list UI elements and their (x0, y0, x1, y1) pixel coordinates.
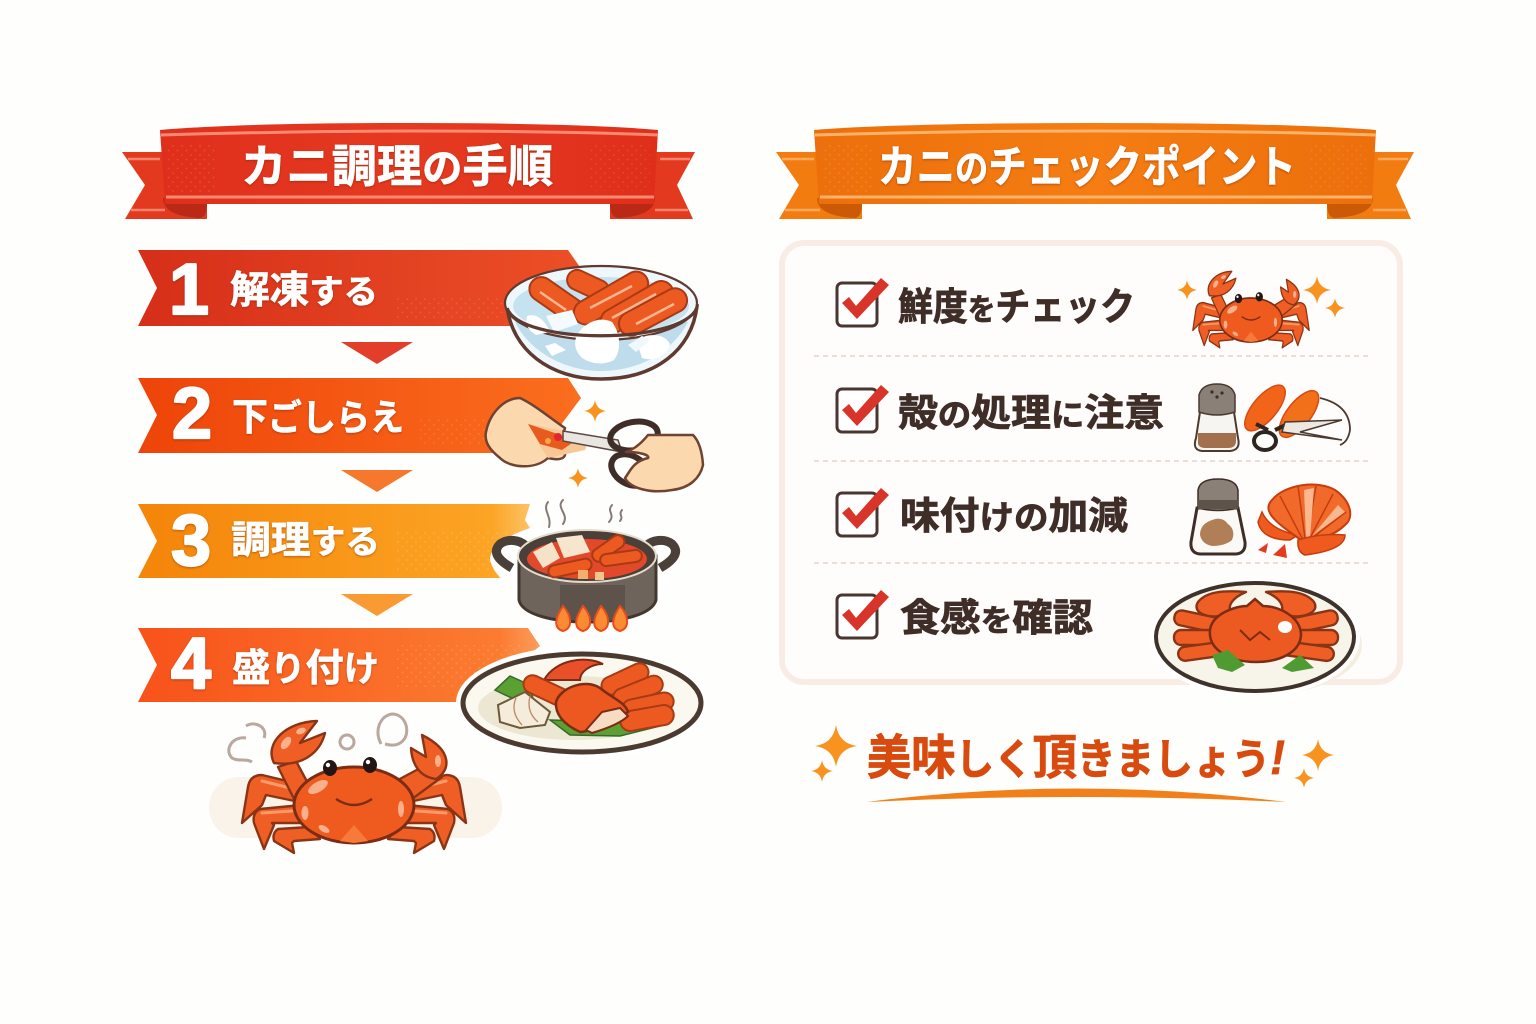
banner: カニのチェックポイント (776, 123, 1414, 219)
arrow 2 (341, 470, 413, 492)
sparkles right (1294, 739, 1334, 788)
item 4 text: 食感を確認 (900, 598, 1093, 640)
sparkles (584, 400, 606, 422)
banner title text: カニ調理の手順 (241, 141, 553, 192)
scissor handles (608, 418, 660, 454)
step 4 number: 4 (171, 624, 211, 704)
icon: plated crab legs (456, 646, 708, 760)
step 1 number: 1 (169, 250, 209, 330)
checkbox 2 (837, 385, 889, 432)
icon: smiling crab with sparkles (1177, 271, 1345, 348)
left hand (486, 398, 565, 466)
steam puffs (229, 714, 407, 762)
icon: seasoning shaker and scallop (1191, 479, 1350, 558)
icon: bowl of thawing crab legs (505, 266, 697, 379)
icon: whole crab on a plate (1150, 579, 1362, 697)
steam (546, 500, 622, 527)
step 3 ribbon (138, 501, 530, 581)
banner: カニ調理の手順 (122, 123, 695, 219)
checkbox 4 (837, 590, 889, 638)
sparkles left (811, 725, 857, 782)
checkbox 3 (837, 488, 889, 536)
item 1 text: 鮮度をチェック (898, 287, 1135, 329)
step 1 label: 解凍する (230, 270, 378, 312)
underline stroke (867, 788, 1286, 802)
flames (556, 606, 627, 631)
right hand (625, 435, 703, 491)
step 4 label: 盛り付け (232, 648, 379, 690)
step 2 ribbon (138, 374, 581, 454)
message text: 美味しく頂きましょう! (867, 732, 1285, 785)
item 3 text: 味付けの加減 (900, 496, 1128, 538)
step 3 label: 調理する (231, 520, 380, 562)
icon: hands cutting crab with scissors (486, 398, 703, 492)
banner title text: カニのチェックポイント (878, 143, 1296, 192)
icon: cooking pot over flames (490, 500, 680, 631)
panel: check points (782, 243, 1400, 697)
arrow 1 (341, 342, 413, 364)
crab mascot with steam (209, 714, 502, 853)
item 2 text: 殻の処理に注意 (898, 393, 1164, 435)
icon: shaker, crab shells and scissors (1195, 379, 1350, 451)
step 3 number: 3 (171, 501, 211, 581)
step 2 number: 2 (172, 374, 212, 454)
closing message (811, 725, 1334, 802)
scissor blades (563, 431, 622, 452)
step 1 ribbon (138, 250, 582, 330)
arrow 3 (341, 594, 413, 616)
checkbox 1 (837, 278, 889, 326)
step 4 ribbon (138, 624, 540, 704)
step 2 label: 下ごしらえ (232, 397, 404, 439)
